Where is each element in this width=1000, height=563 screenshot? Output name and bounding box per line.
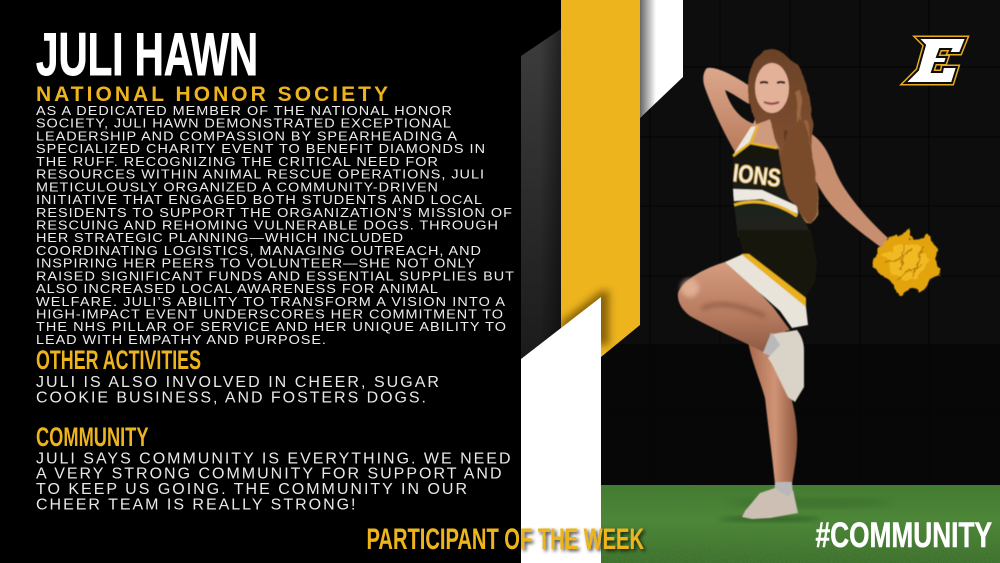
text block: National Honor Society description: LEADERSHIP AND COMPASSION BY SPEARHEADING A [36,129,458,143]
text block: National Honor Society description: HIGH-IMPACT EVENT UNDERSCORES HER COMMITMENT TO [36,307,503,321]
text block: National Honor Society description: COORDINATING LOGISTICS, MANAGING OUTREACH, AND [36,244,481,258]
turf [600,485,1000,563]
text block: National Honor Society description [36,104,515,347]
raised leg shoe [768,330,804,402]
left black panel [0,0,602,563]
hair strands [786,90,814,220]
heading: National Honor Society: NATIONAL HONOR SOCIETY [36,83,388,106]
E logo [905,38,966,83]
text block: National Honor Society description: INSPIRING HER PEERS TO VOLUNTEER—SHE NOT ONLY [36,256,475,270]
uniform lettering: IONS [731,159,782,193]
neck and chest [748,108,790,150]
text block: other activities [36,374,439,406]
cheer top [731,125,813,237]
text block: National Honor Society description: SOCIETY, JULI HAWN DEMONSTRATED EXCEPTIONAL [36,116,451,131]
text block: National Honor Society description: THE RUFF. RECOGNIZING THE CRITICAL NEED FOR [36,155,438,169]
text block: National Honor Society description: AS A DEDICATED MEMBER OF THE NATIONAL HONOR [36,104,452,118]
photo background: padded wall and turf [600,0,1000,563]
standing sock [774,482,793,498]
text block: other activities: JULI IS ALSO INVOLVED IN CHEER, SUGAR [36,374,439,391]
heading: Other Activities: OTHER ACTIVITIES [36,345,201,375]
thigh and bent leg [678,262,790,352]
thigh shadow [702,304,765,316]
right arm [806,132,888,248]
text block: National Honor Society description: INITIATIVE THAT ENGAGED BOTH STUDENTS AND LOCAL [36,193,482,207]
raised arm [703,68,762,152]
padded black wall [600,0,1000,485]
yellow skirt trim [741,254,806,307]
text block: National Honor Society description: RAISED SIGNIFICANT FUNDS AND ESSENTIAL SUPPLIES BUT [36,269,515,283]
text block: National Honor Society description: RESOURCES WITHIN ANIMAL RESCUE OPERATIONS, JULI [36,167,484,181]
text block: other activities: COOKIE BUSINESS, AND FOSTERS DOGS. [36,390,426,406]
text block: National Honor Society description: LEAD WITH EMPATHY AND PURPOSE. [36,333,326,347]
text block: community quote: CHEER TEAM IS REALLY STRONG! [36,496,356,513]
standing leg [748,325,797,484]
standing shoe [742,488,798,519]
white top stripe [640,0,683,118]
hair back [747,49,818,224]
black skirt [738,230,817,298]
heading: Community: COMMUNITY [36,422,148,452]
text block: National Honor Society description: THE NHS PILLAR OF SERVICE AND HER UNIQUE ABILITY TO [36,320,506,334]
text block: community quote: JULI SAYS COMMUNITY IS EVERYTHING. WE NEED [36,450,510,467]
face [755,63,789,113]
pom-pom [873,231,940,295]
white skirt band [725,254,808,328]
cheerleader photo [678,49,940,519]
facial features [760,82,785,104]
hair front over top [781,118,818,224]
white lower stripe [521,297,601,563]
knee highlight [681,279,699,297]
text block: National Honor Society description: RESCUING AND REHOMING VULNERABLE DOGS. THROUGH [36,218,498,232]
yellow stripe [561,0,640,357]
text block: National Honor Society description: METICULOUSLY ORGANIZED A COMMUNITY-DRIVEN [36,180,438,194]
text block: National Honor Society description: RESIDENTS TO SUPPORT THE ORGANIZATION’S MISSION OF [36,205,512,220]
text block: National Honor Society description: WELFARE. JULI’S ABILITY TO TRANSFORM A VISION INTO A [36,294,506,309]
text block: National Honor Society description: SPECIALIZED CHARITY EVENT TO BENEFIT DIAMONDS IN [36,142,485,156]
label: Participant of the Week: PARTICIPANT OF THE WEEK [366,523,644,556]
angled graphic stripes [521,0,683,563]
text block: community quote: A VERY STRONG COMMUNITY FOR SUPPORT AND [36,466,502,483]
dark grey stripe [521,20,561,365]
title: student name: JULI HAWN [36,21,258,88]
text block: National Honor Society description: HER STRATEGIC PLANNING—WHICH INCLUDED [36,231,403,245]
raised leg sock [763,333,783,360]
text block: National Honor Society description: ALSO INCREASED LOCAL AWARENESS FOR ANIMAL [36,282,438,296]
text block: community quote: TO KEEP US GOING. THE COMMUNITY IN OUR [36,481,467,498]
text block: community quote [36,450,510,513]
